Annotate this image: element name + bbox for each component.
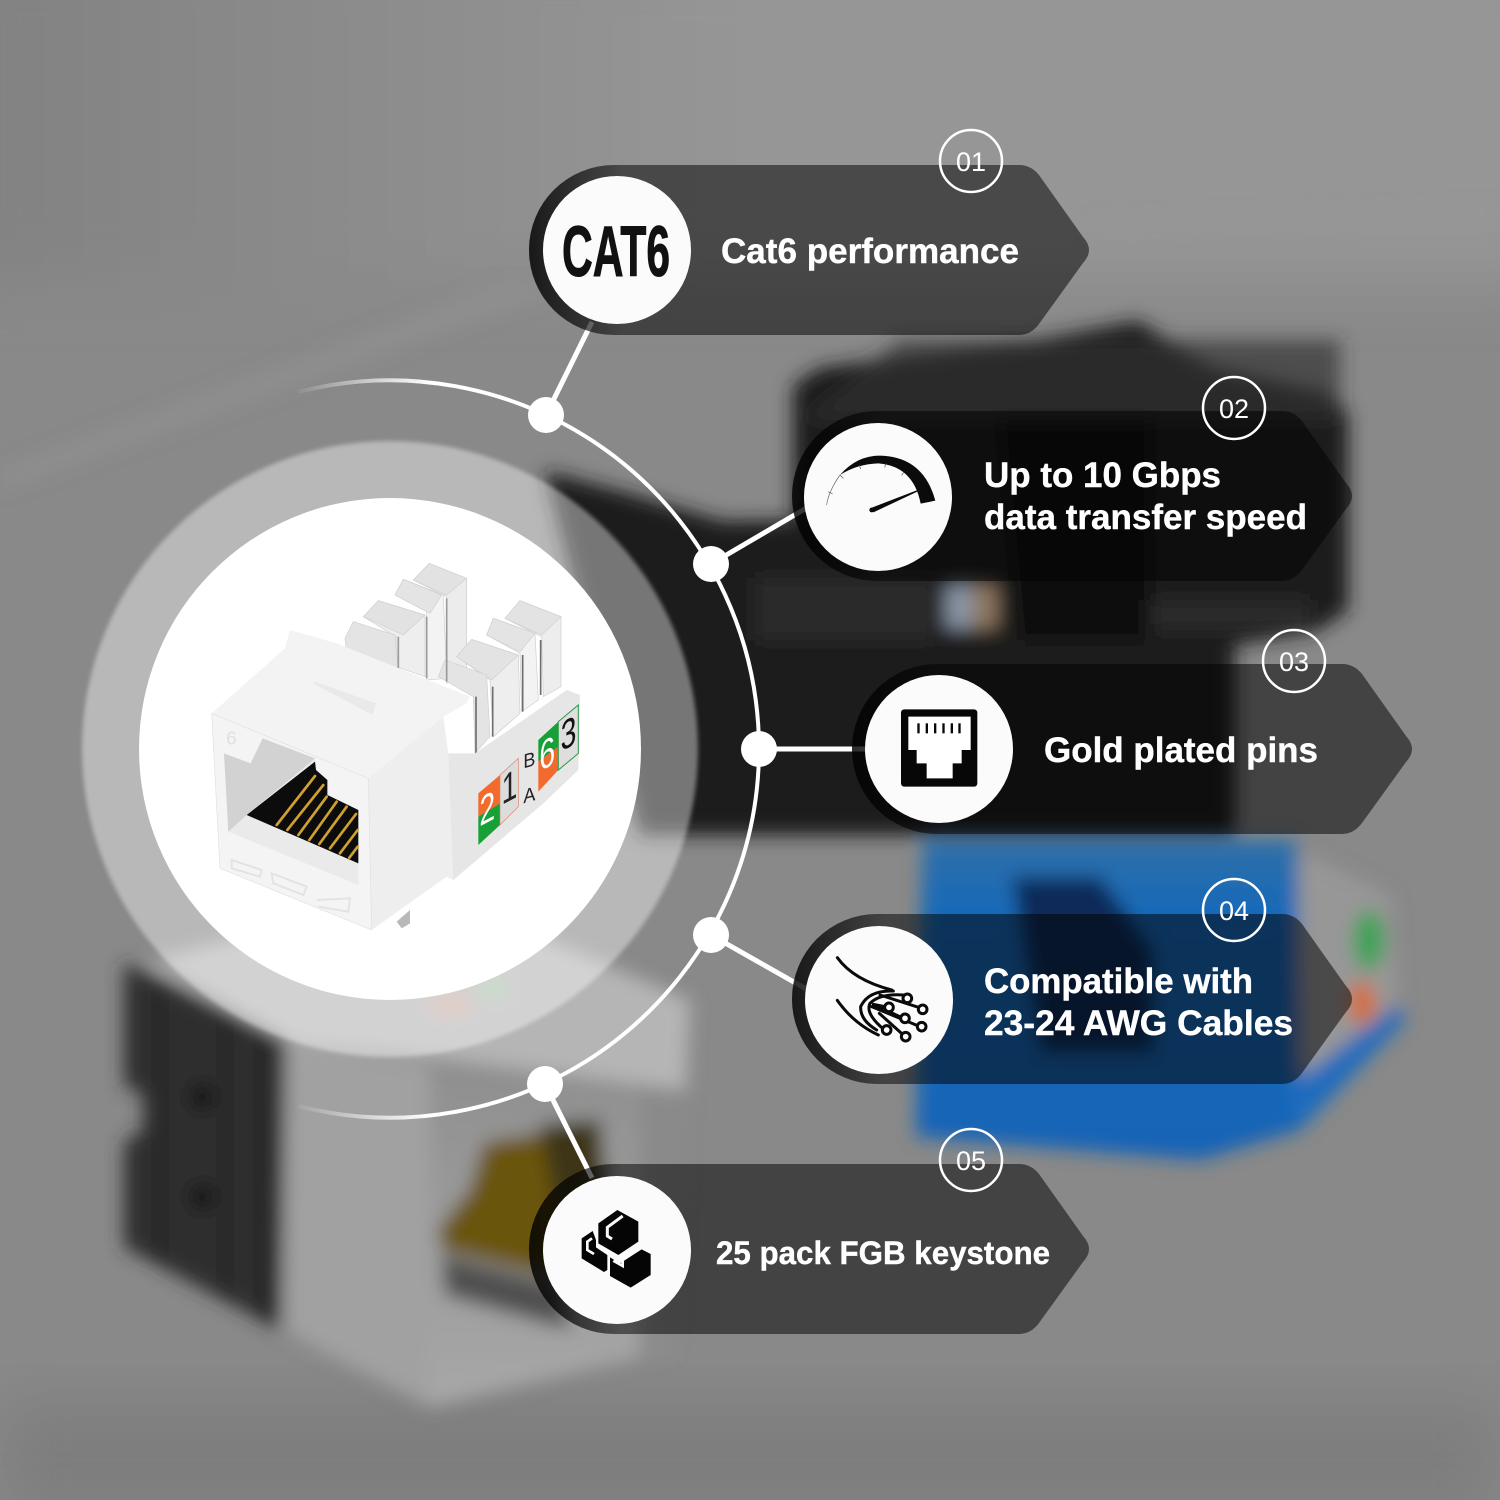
panel 02: speed bbox=[792, 377, 1352, 581]
gold pins bbox=[277, 776, 358, 858]
fin gap shadows bbox=[398, 598, 541, 753]
icon circle: CAT6 bbox=[543, 176, 691, 324]
icon shadow bbox=[529, 165, 699, 335]
connector arc bbox=[298, 380, 759, 1118]
wire map labels: 1 bbox=[502, 760, 517, 814]
label text bbox=[984, 456, 1307, 537]
label text bbox=[984, 962, 1293, 1043]
icon shadow bbox=[792, 411, 962, 581]
gold contact pad bbox=[247, 762, 358, 863]
icon circle: speedometer bbox=[804, 423, 952, 571]
number badge 01: 01 bbox=[956, 147, 986, 177]
product: white keystone jack bbox=[212, 563, 580, 930]
embossed logo bbox=[232, 860, 350, 912]
number badge 03: 03 bbox=[1279, 647, 1309, 677]
icon shadow bbox=[792, 914, 962, 1084]
panel shape bbox=[792, 914, 1352, 1084]
connector lines bbox=[545, 322, 870, 1178]
panel 03: gold plated pins bbox=[852, 630, 1412, 834]
number badge 04 bbox=[1203, 879, 1265, 941]
number badge 03 bbox=[1263, 630, 1325, 692]
panel shape bbox=[852, 664, 1412, 834]
white product circle bbox=[139, 498, 641, 1000]
wire map labels: 6 bbox=[539, 726, 555, 781]
label text: 23-24 AWG Cables bbox=[984, 1004, 1293, 1043]
panel 04: cable compatibility bbox=[792, 879, 1352, 1084]
jack rear fins bbox=[345, 563, 561, 753]
wire map labels bbox=[478, 705, 578, 845]
number badge 05: 05 bbox=[956, 1146, 986, 1176]
jack label block bbox=[447, 690, 580, 880]
panel 05: 25 pack bbox=[529, 1129, 1089, 1334]
wire map labels: B bbox=[523, 749, 535, 774]
icon shadow bbox=[852, 664, 1022, 834]
label text: data transfer speed bbox=[984, 498, 1307, 537]
label text: Gold plated pins bbox=[1044, 731, 1318, 770]
mount tab bbox=[397, 910, 410, 928]
icon shadow bbox=[529, 1164, 699, 1334]
icon circle: CAT6: CAT6 bbox=[562, 213, 670, 292]
jack top face bbox=[212, 630, 470, 778]
jack port opening bbox=[224, 738, 358, 885]
wire map labels: A bbox=[523, 784, 535, 809]
translucent halo ring bbox=[82, 441, 698, 1057]
label text: Cat6 performance bbox=[721, 232, 1019, 271]
jack front face bbox=[212, 713, 372, 930]
number badge 01 bbox=[940, 130, 1002, 192]
icon circle: ethernet port bbox=[865, 675, 1013, 823]
panel shape bbox=[792, 411, 1352, 581]
panel shape bbox=[529, 165, 1089, 335]
number badge 02: 02 bbox=[1219, 394, 1249, 424]
number badge 05 bbox=[940, 1129, 1002, 1191]
panel shape bbox=[529, 1164, 1089, 1334]
jack right face bbox=[368, 717, 453, 930]
connector nodes bbox=[527, 397, 777, 1102]
icon circle: fiber cable bbox=[805, 926, 953, 1074]
icon circle: boxes bbox=[543, 1176, 691, 1324]
label text: Compatible with bbox=[984, 962, 1253, 1001]
label text: 25 pack FGB keystone bbox=[716, 1235, 1050, 1271]
wire map labels: 2 bbox=[479, 781, 495, 836]
wire map labels: 3 bbox=[561, 706, 576, 761]
number badge 04: 04 bbox=[1219, 896, 1249, 926]
panel 01: Cat6 performance bbox=[529, 130, 1089, 335]
number badge 02 bbox=[1203, 377, 1265, 439]
label text: Up to 10 Gbps bbox=[984, 456, 1221, 495]
embossed number: 9 bbox=[226, 728, 237, 749]
